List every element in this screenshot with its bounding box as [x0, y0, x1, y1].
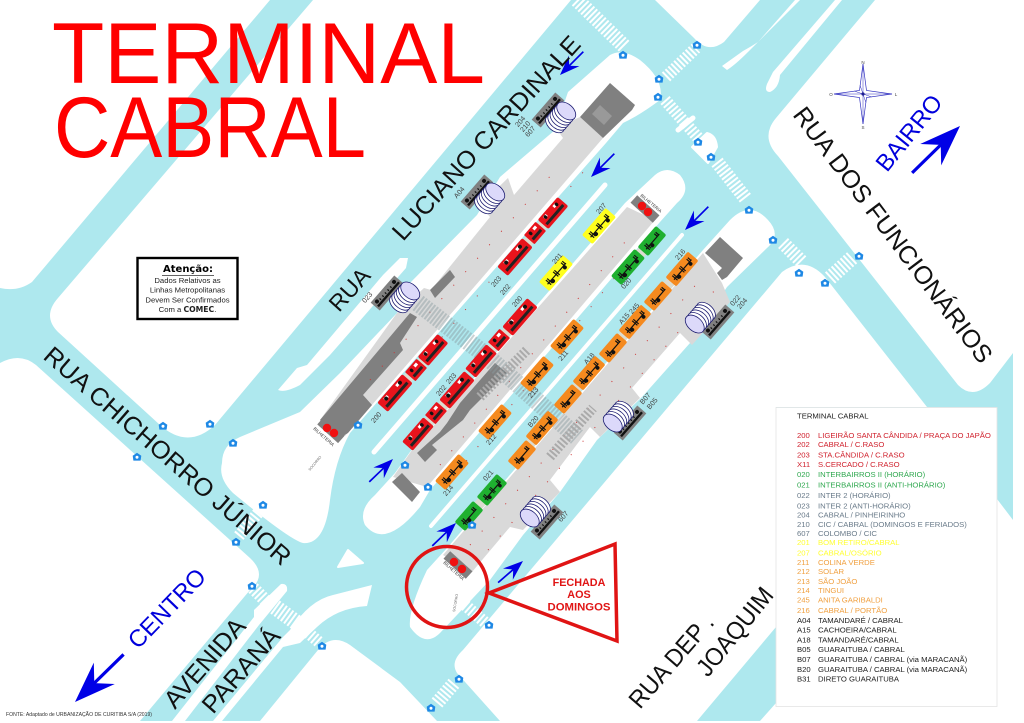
small service labels: SOCORRO — [452, 593, 459, 612]
legend panel: 202 — [797, 440, 810, 449]
bus line number labels: 212 — [485, 433, 498, 447]
ticket office: platform 1 — [312, 417, 345, 447]
legend panel: TAMANDARÉ / CABRAL — [818, 616, 904, 625]
attention box: Com a COMEC. — [159, 305, 216, 314]
street names: AVENIDA — [158, 612, 252, 714]
ticket office: platform 3 — [442, 551, 472, 581]
platform 2 — [392, 207, 655, 502]
legend panel: 213 — [797, 577, 810, 586]
street names: RUA CHICHORRO JÚNIOR — [38, 341, 297, 571]
legend panel: B20 — [797, 665, 811, 674]
bus line number labels: 204 — [736, 297, 749, 311]
bus line number labels: 200 — [370, 411, 383, 425]
legend panel: 214 — [797, 586, 811, 595]
ticket office: platform 2: BILHETERIA — [639, 193, 663, 214]
bus line number labels: 203 — [445, 372, 458, 386]
legend panel: LIGEIRÃO SANTA CÂNDIDA / PRAÇA DO JAPÃO — [818, 431, 991, 440]
bus line number labels: 214 — [442, 484, 455, 498]
street names: PARANÁ — [196, 622, 286, 719]
attention box: Linhas Metropolitanas — [150, 286, 225, 294]
buses: red lane beside platform 2 — [402, 298, 538, 451]
street names: JOAQUIM — [691, 582, 779, 682]
ticket office: platform 2 — [631, 193, 663, 223]
bus line number labels: 023 — [361, 291, 374, 305]
legend panel: STA.CÂNDIDA / C.RASO — [818, 450, 905, 460]
pedestrian crosswalks — [238, 0, 853, 703]
legend panel: B31 — [797, 674, 811, 684]
bus line number labels: 021 — [482, 469, 495, 483]
legend panel: CABRAL / PORTÃO — [818, 606, 887, 615]
direction: centro: CENTRO — [123, 563, 212, 654]
legend panel: BOM RETIRO/CABRAL — [818, 538, 900, 547]
legend panel: CIC / CABRAL (DOMINGOS E FERIADOS) — [818, 520, 967, 529]
closed on sundays callout: DOMINGOS — [548, 602, 610, 614]
legend panel: TERMINAL CABRAL — [797, 412, 869, 420]
buses at canopy stops — [371, 92, 734, 540]
legend panel: INTER 2 (ANTI-HORÁRIO) — [818, 502, 911, 510]
legend panel: SÃO JOÃO — [818, 577, 857, 586]
legend panel: ANITA GARIBALDI — [818, 596, 883, 604]
legend panel: INTER 2 (HORÁRIO) — [818, 491, 891, 500]
legend panel: 204 — [797, 510, 811, 520]
bus line number labels: 204 — [514, 115, 527, 129]
platform 1 — [320, 83, 635, 439]
street names: RUA — [323, 262, 376, 316]
bus line number labels: A15 — [618, 312, 632, 326]
buses: orange — [435, 252, 699, 490]
legend panel: 607 — [797, 529, 810, 538]
buses: lane beside platform 1 — [377, 197, 568, 412]
bus line number labels: 203 — [490, 275, 503, 289]
legend panel: GUARAITUBA / CABRAL — [818, 645, 905, 654]
covered walkways — [418, 303, 593, 457]
compass rose: S — [861, 125, 865, 130]
bus line number labels: 216 — [674, 248, 687, 262]
legend panel: CABRAL / C.RASO — [818, 440, 884, 449]
legend panel: 020 — [797, 470, 810, 479]
bus line number labels: 202 — [499, 283, 512, 297]
legend panel: B05 — [797, 645, 811, 654]
bus line number labels: 211 — [558, 349, 570, 363]
direction: centro — [65, 563, 212, 713]
bus line number labels: 607 — [524, 125, 537, 139]
bus line number labels: 210 — [519, 120, 532, 134]
legend panel: SOLAR — [818, 567, 845, 576]
traffic direction arrows — [364, 46, 714, 588]
direction: bairro: BAIRRO — [871, 90, 948, 177]
legend panel: TAMANDARÉ/CABRAL — [818, 636, 899, 644]
bus line number labels: 245 — [628, 302, 641, 316]
bus line number labels: 213 — [527, 386, 540, 400]
legend panel: 212 — [797, 567, 810, 576]
ticket office: platform 1: BILHETERIA — [312, 426, 335, 447]
legend panel: 210 — [797, 520, 810, 529]
legend panel — [776, 408, 997, 706]
street names: RUA DOS FUNCIONÁRIOS — [787, 101, 999, 369]
bus line number labels: 607 — [557, 510, 570, 524]
legend panel: 245 — [797, 596, 810, 604]
legend panel: S.CERCADO / C.RASO — [818, 460, 900, 469]
legend panel: DIRETO GUARAITUBA — [818, 674, 900, 684]
bus joints — [395, 213, 682, 516]
bus line number labels: A04 — [453, 186, 467, 200]
legend panel: 200 — [797, 431, 810, 440]
legend panel: INTERBAIRROS II (ANTI-HORÁRIO) — [818, 480, 946, 490]
bus line number labels: 201 — [551, 252, 564, 266]
title: TERMINAL — [52, 6, 485, 102]
legend panel: 216 — [797, 606, 810, 615]
attention box: Devem Ser Confirmados — [145, 296, 230, 304]
street names: LUCIANO CARDINALE — [387, 30, 586, 246]
bus line number labels — [361, 115, 749, 524]
legend panel: 207 — [797, 548, 810, 558]
compass rose: N — [861, 60, 865, 65]
closed on sundays callout — [406, 544, 617, 641]
title: CABRAL — [54, 80, 366, 176]
title — [52, 6, 485, 176]
platform 3 — [443, 237, 743, 572]
legend panel: 203 — [797, 450, 810, 460]
legend panel: 021 — [797, 480, 810, 490]
legend panel: X11 — [797, 460, 810, 469]
bus line number labels: 022 — [729, 294, 742, 308]
legend panel: A15 — [797, 626, 811, 634]
traffic markers — [133, 41, 863, 712]
legend panel: 201 — [797, 538, 810, 547]
canopies — [386, 98, 719, 531]
legend panel: GUARAITUBA / CABRAL (via MARACANÃ) — [818, 655, 968, 664]
legend panel: A18 — [797, 636, 811, 644]
closed on sundays callout: AOS — [567, 589, 591, 601]
small service labels — [308, 455, 459, 612]
street names: RUA DEP . — [623, 609, 720, 714]
buses: yellow — [539, 208, 616, 291]
attention box — [138, 258, 238, 319]
bus line number labels: B20 — [527, 415, 541, 429]
legend panel: CACHOEIRA/CABRAL — [818, 626, 897, 634]
bus line number labels: B05 — [646, 397, 660, 411]
compass rose — [829, 60, 898, 130]
compass rose: O — [829, 92, 833, 97]
legend panel: 211 — [797, 558, 809, 567]
legend panel: COLOMBO / CIC — [818, 529, 877, 538]
bus line number labels: 020 — [620, 277, 633, 291]
legend panel: 023 — [797, 502, 810, 510]
attention box: Atenção: — [163, 264, 213, 275]
bus line number labels: 202 — [435, 384, 448, 398]
closed on sundays callout: FECHADA — [553, 577, 606, 589]
source note: FONTE: Adaptado de URBANIZAÇÃO DE CURITIBA S/A (2019) — [6, 711, 152, 718]
legend panel: TINGUI — [818, 586, 844, 595]
bus line number labels: B07 — [639, 392, 653, 406]
legend panel: 022 — [797, 491, 810, 500]
legend panel: CABRAL / PINHEIRINHO — [818, 510, 905, 520]
bus line number labels: 200 — [511, 295, 524, 309]
legend panel: CABRAL/OSÓRIO — [818, 548, 882, 558]
legend panel: COLINA VERDE — [818, 558, 875, 567]
legend panel: GUARAITUBA / CABRAL (via MARACANÃ) — [818, 665, 968, 674]
bus line number labels: 207 — [595, 202, 608, 216]
small service labels: SOCORRO — [308, 455, 323, 472]
ticket office: platform 3: BILHETERIA — [442, 560, 465, 581]
compass rose: L — [895, 92, 898, 97]
bus line number labels: A18 — [583, 352, 597, 366]
attention box: Dados Relativos as — [154, 276, 221, 285]
buses: green — [455, 226, 666, 531]
legend panel: B07 — [797, 655, 811, 664]
legend panel: A04 — [797, 616, 811, 625]
legend panel: INTERBAIRROS II (HORÁRIO) — [818, 470, 926, 479]
